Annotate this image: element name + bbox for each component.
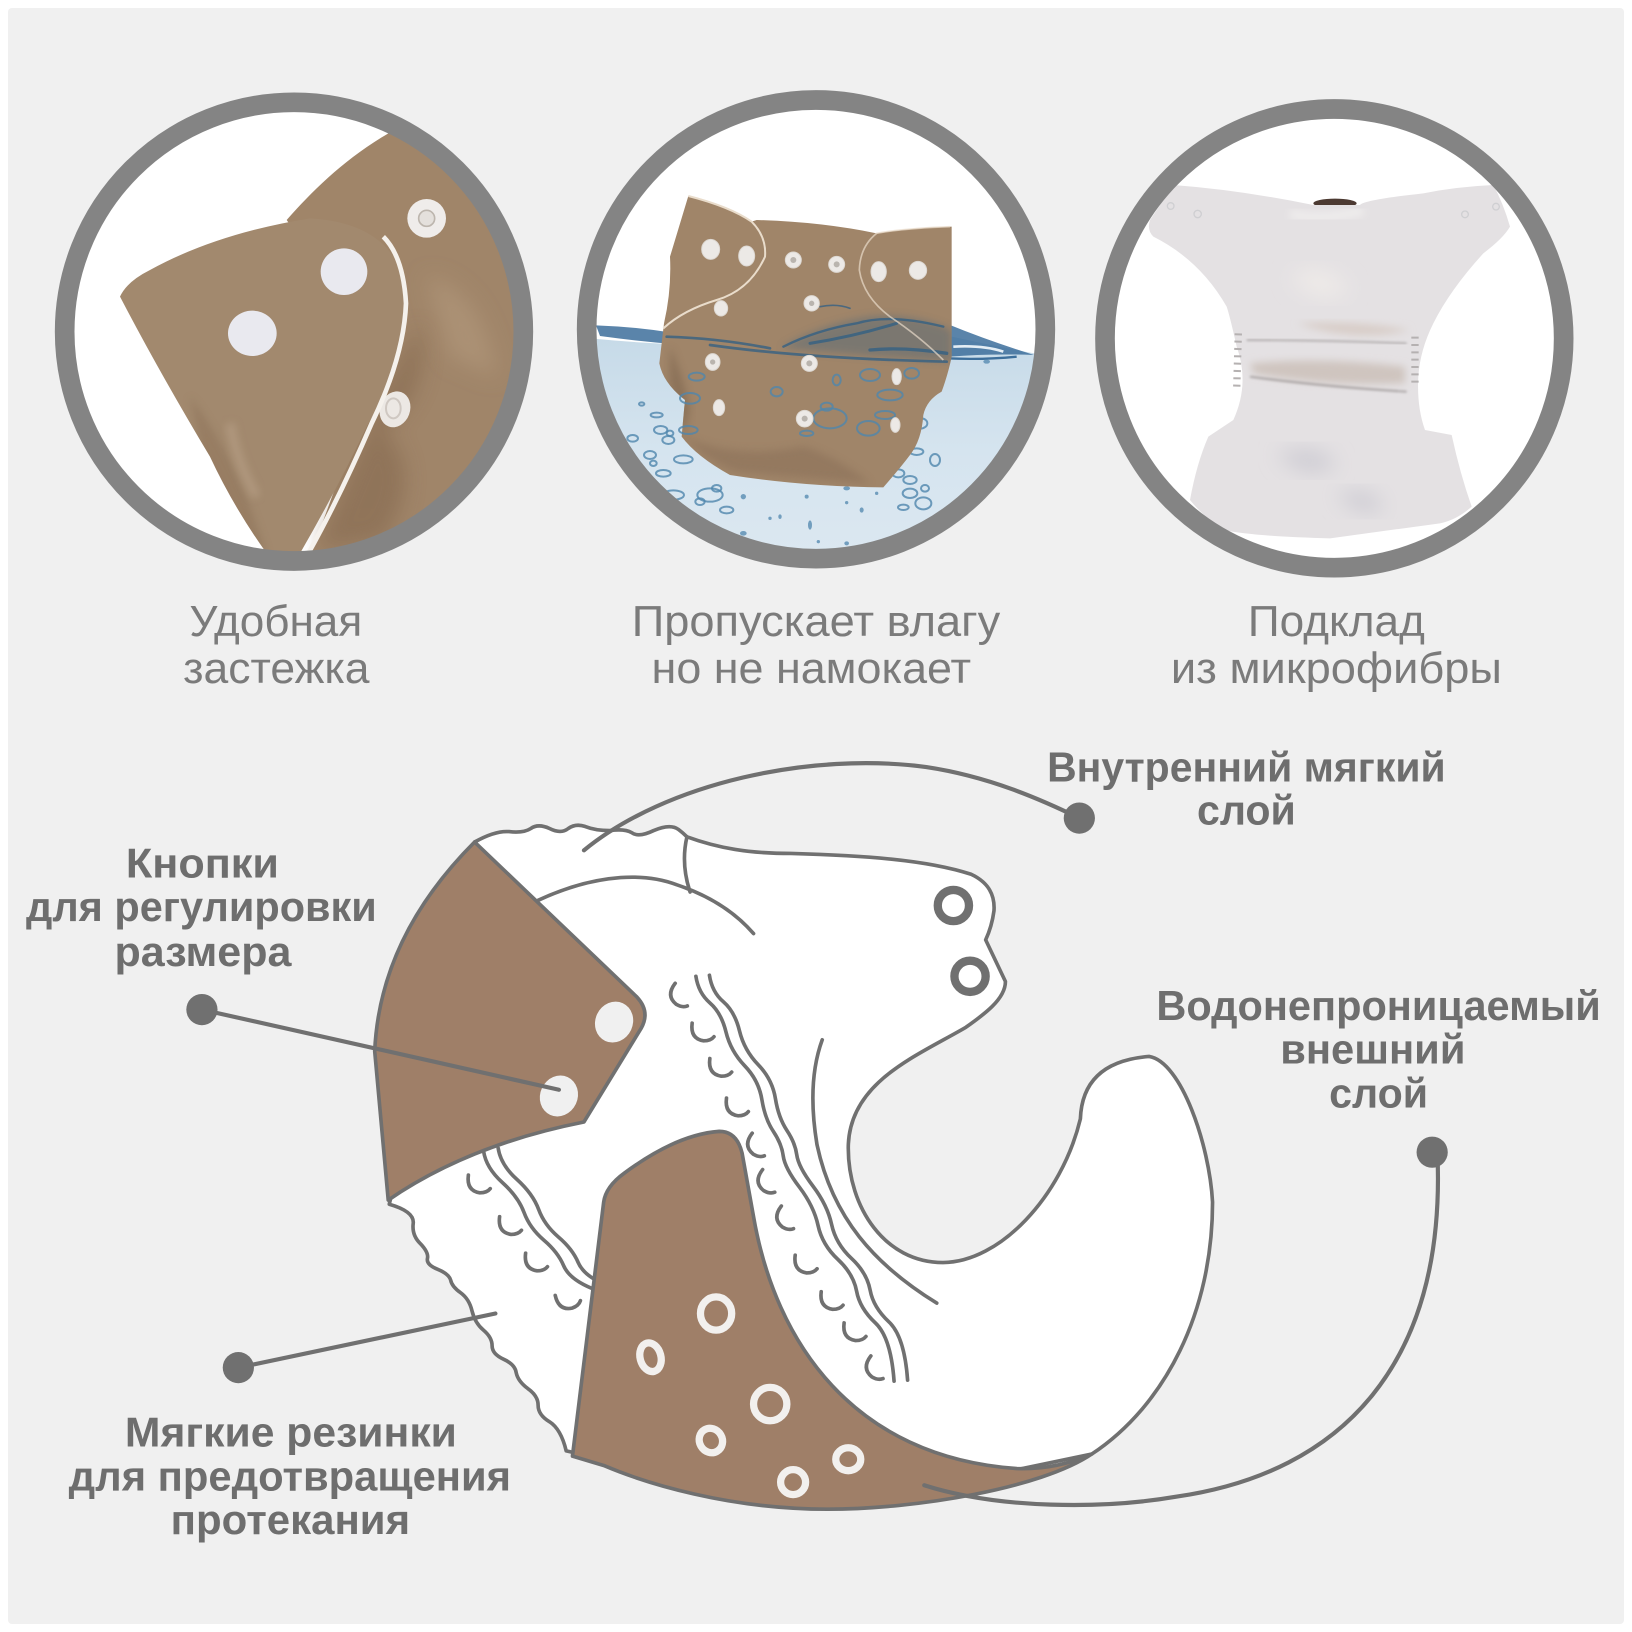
diaper white body — [389, 825, 1213, 1509]
photo circle: microfibre lining — [1105, 109, 1564, 568]
ring — [587, 100, 1045, 559]
callout: waterproof outer layer: внешний — [1280, 1026, 1465, 1073]
callout: waterproof outer layer: Водонепроницаемый — [1156, 982, 1601, 1029]
water — [596, 339, 1034, 549]
callout: adjustment snaps — [26, 839, 559, 1090]
caption: moisture: но не намокает — [652, 644, 971, 693]
lower back snap — [380, 391, 410, 428]
snaps — [702, 239, 927, 432]
bubbles on diaper — [679, 368, 919, 436]
diaper illustration — [375, 825, 1213, 1509]
bubbles outside diaper — [627, 402, 940, 513]
callout: adjustment snaps: для регулировки — [26, 883, 377, 930]
wave crest right — [950, 325, 1034, 357]
flap outlines — [663, 196, 765, 328]
photo circle: diaper in water — [587, 100, 1045, 563]
callout: soft elastics — [69, 1314, 511, 1543]
callout: soft elastics: протекания — [171, 1496, 410, 1543]
elastic gathers — [468, 983, 890, 1382]
grey snap rings — [938, 890, 986, 992]
callout: inner soft layer: слой — [1197, 786, 1296, 833]
flap white edge — [308, 237, 406, 553]
caption: lining: Подклад — [1248, 597, 1425, 646]
ring — [65, 102, 523, 561]
callout: waterproof outer layer — [924, 982, 1601, 1505]
shell snap rings — [637, 1297, 861, 1495]
brown waist panel — [375, 842, 645, 1200]
inner waist curve — [538, 877, 754, 934]
caption: clasp: застежка — [183, 644, 370, 693]
callout: waterproof outer layer: слой — [1329, 1069, 1428, 1116]
callout: adjustment snaps: Кнопки — [126, 839, 279, 886]
caption: moisture: Пропускает влагу — [632, 597, 1000, 646]
lower elastic lines — [484, 1148, 607, 1289]
wave crest left — [596, 325, 663, 343]
dark label at back — [1313, 198, 1357, 205]
vertical seam — [684, 837, 690, 892]
lining body — [1149, 185, 1510, 538]
snap 2 — [321, 248, 367, 295]
photo circle: snap fastener close-up — [65, 102, 550, 561]
brown outer shell panel — [572, 1131, 1092, 1509]
back diaper fabric — [286, 134, 514, 550]
diaper body — [659, 196, 952, 487]
callout: adjustment snaps: размера — [114, 928, 292, 975]
upper elastic lines — [696, 975, 908, 1381]
snap 1 — [228, 311, 277, 356]
inner leg curve — [813, 1040, 937, 1303]
front flap — [120, 218, 404, 553]
faint snaps on lining — [1167, 203, 1499, 218]
caption: lining: из микрофибры — [1171, 644, 1502, 693]
caption: clasp: Удобная — [189, 597, 362, 646]
lower section in reference scale — [26, 597, 1601, 1543]
back snap with ring — [407, 199, 446, 238]
ring — [1105, 109, 1564, 568]
caption: moisture — [632, 597, 1000, 693]
callout: inner soft layer — [584, 744, 1446, 850]
callout: soft elastics: для предотвращения — [69, 1452, 511, 1499]
panel snap holes — [533, 995, 640, 1123]
caption: lining — [1171, 597, 1502, 693]
callout: inner soft layer: Внутренний мягкий — [1047, 744, 1446, 791]
callout: soft elastics: Мягкие резинки — [125, 1409, 457, 1456]
soft folds — [1250, 361, 1405, 384]
waterline on diaper — [783, 316, 952, 362]
caption: clasp — [183, 597, 370, 693]
